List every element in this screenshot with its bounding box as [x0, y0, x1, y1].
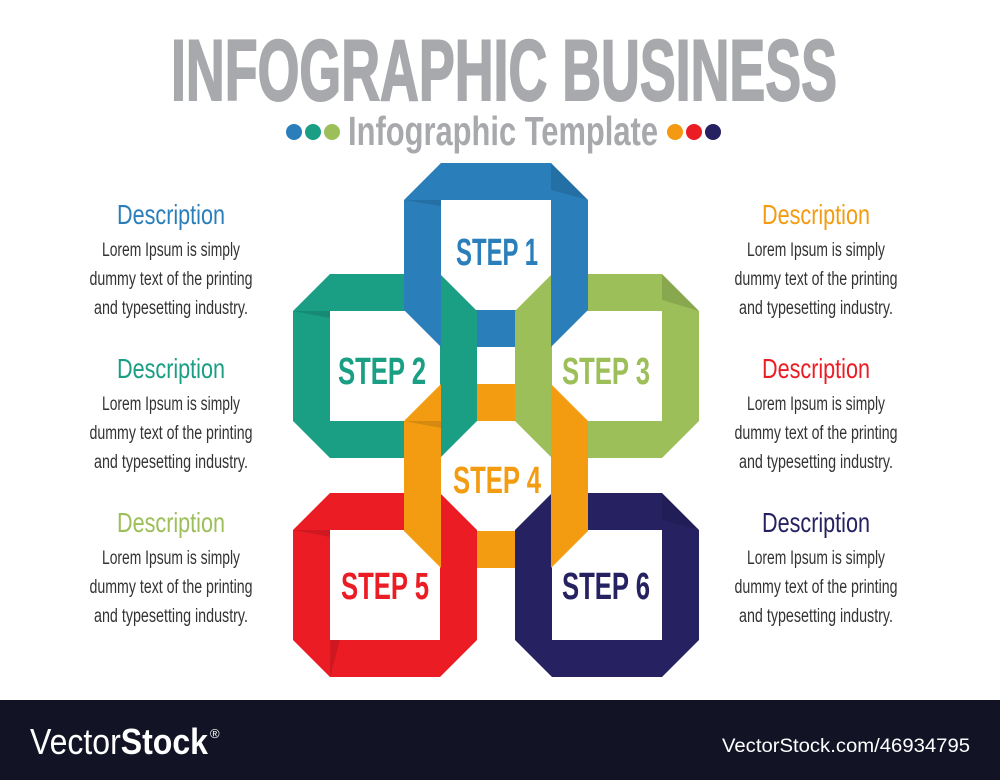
right descriptions: Description: [762, 507, 870, 538]
step labels: STEP 2: [338, 351, 426, 393]
footer bar: [0, 700, 1000, 780]
left descriptions: [90, 199, 252, 627]
left descriptions: dummy text of the printing: [90, 423, 252, 444]
ring: step 2: [293, 274, 477, 458]
step labels: STEP 4: [453, 460, 541, 502]
subtitle with dots: Infographic Template: [348, 108, 658, 154]
right descriptions: dummy text of the printing: [734, 423, 898, 444]
right descriptions: Lorem Ipsum is simply: [747, 394, 885, 415]
step labels: [338, 232, 650, 608]
ring: step 4: [404, 384, 588, 568]
ring: step 3: [515, 274, 699, 458]
weave: blue bands over step 2 and 3: [404, 274, 588, 347]
left descriptions: Description: [117, 353, 225, 384]
right descriptions: dummy text of the printing: [734, 269, 898, 290]
left descriptions: dummy text of the printing: [90, 269, 252, 290]
left descriptions: and typesetting industry.: [94, 298, 248, 319]
ring: step 6: [515, 493, 699, 677]
right descriptions: and typesetting industry.: [739, 298, 893, 319]
left descriptions: Description: [117, 507, 225, 538]
right descriptions: Description: [762, 199, 870, 230]
left descriptions: Lorem Ipsum is simply: [102, 394, 240, 415]
step labels: STEP 1: [456, 232, 538, 274]
right descriptions: Lorem Ipsum is simply: [747, 548, 885, 569]
fold shading: [293, 163, 699, 677]
ring: step 5: [293, 493, 477, 677]
footer bar: VectorStock.com/46934795: [722, 736, 970, 757]
step labels: STEP 3: [562, 351, 650, 393]
chain diagram: [293, 163, 699, 677]
right descriptions: and typesetting industry.: [739, 606, 893, 627]
right descriptions: Lorem Ipsum is simply: [747, 240, 885, 261]
right descriptions: Description: [762, 353, 870, 384]
weave: orange bands over step 5 and 6: [404, 493, 588, 568]
right descriptions: dummy text of the printing: [734, 577, 898, 598]
step labels: STEP 5: [341, 566, 429, 608]
step labels: STEP 6: [562, 566, 650, 608]
footer bar: VectorStock: [30, 721, 209, 762]
ring: step 1: [404, 163, 588, 347]
right descriptions: and typesetting industry.: [739, 452, 893, 473]
left descriptions: and typesetting industry.: [94, 452, 248, 473]
footer bar: ®: [210, 726, 220, 741]
left descriptions: dummy text of the printing: [90, 577, 252, 598]
left descriptions: and typesetting industry.: [94, 606, 248, 627]
weave: orange bands over step 2 and 3: [404, 384, 588, 458]
right descriptions: [734, 199, 898, 627]
left descriptions: Lorem Ipsum is simply: [102, 240, 240, 261]
left descriptions: Lorem Ipsum is simply: [102, 548, 240, 569]
left descriptions: Description: [117, 199, 225, 230]
